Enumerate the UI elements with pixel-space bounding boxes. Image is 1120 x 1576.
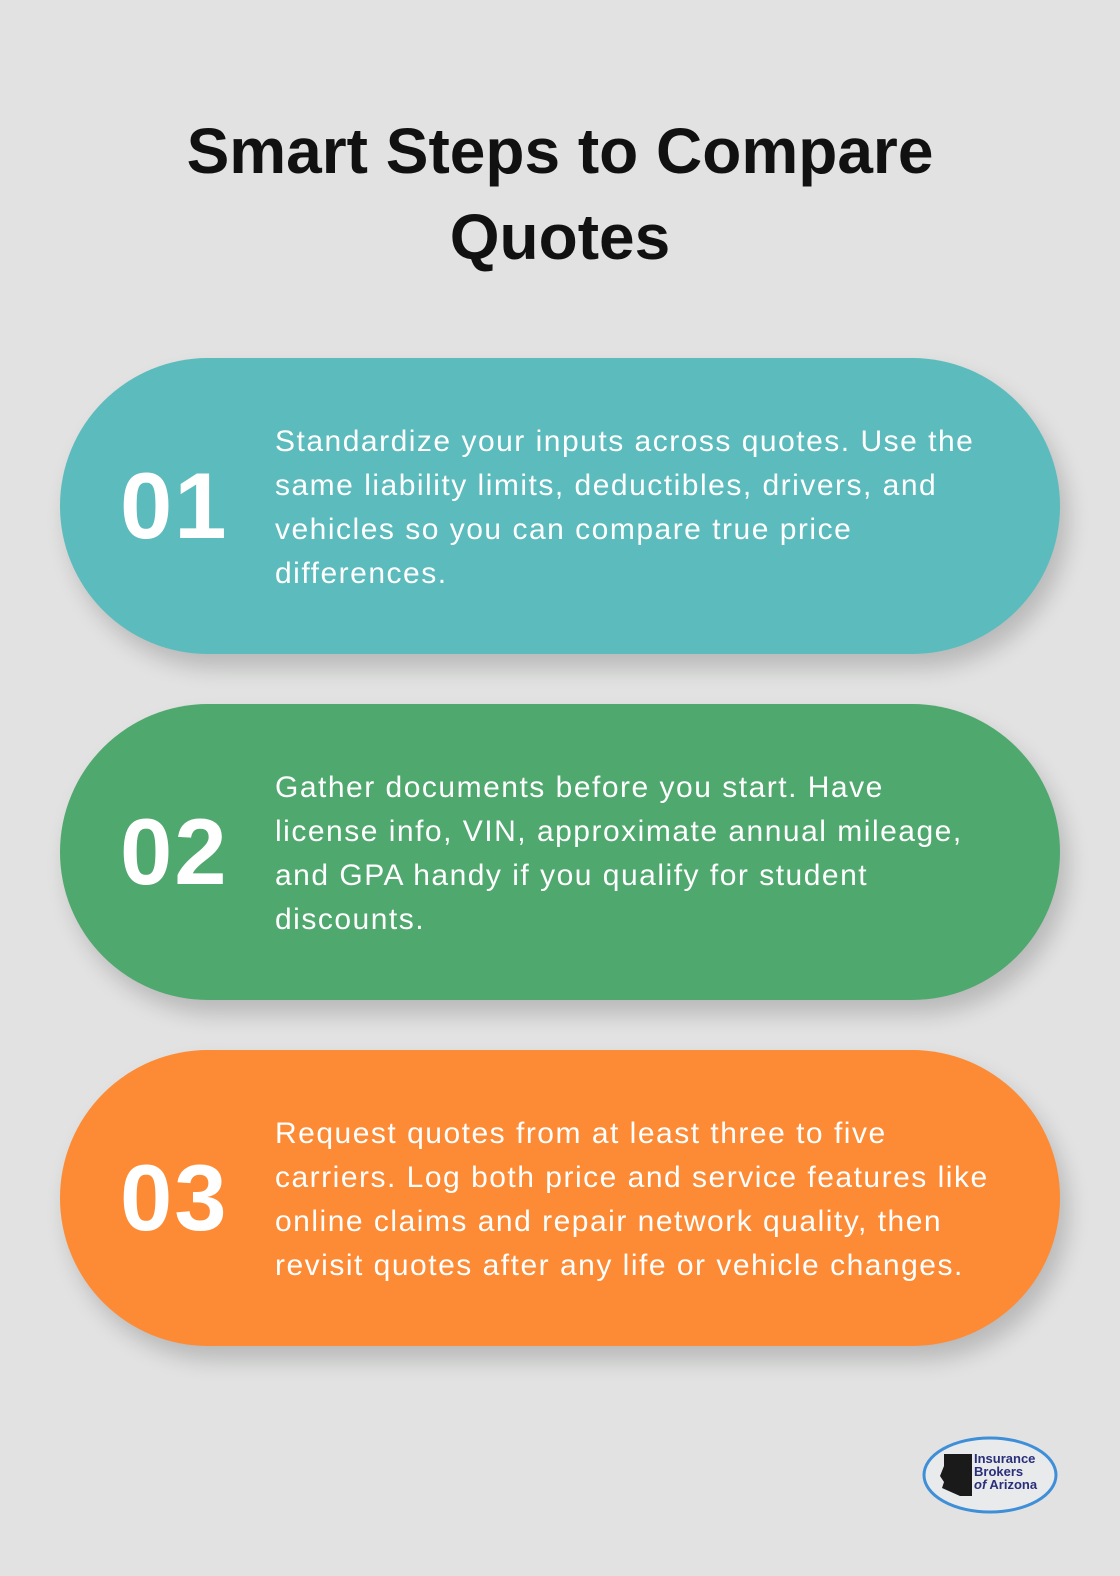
text step 03: online claims and repair network quality, then [275, 1205, 942, 1238]
number 01: 01 [120, 453, 229, 558]
text step 01 [275, 425, 974, 590]
text step 03 [275, 1117, 989, 1282]
title: Smart Steps to Compare [187, 115, 933, 187]
logo [922, 1436, 1058, 1514]
text step 02: discounts. [275, 903, 425, 936]
panel: step 03 [60, 1050, 1060, 1346]
text step 03: Request quotes from at least three to five [275, 1117, 887, 1150]
text step 01: vehicles so you can compare true price [275, 513, 852, 546]
logo: Insurance [974, 1451, 1035, 1466]
title: Quotes [450, 201, 670, 273]
number 03: 03 [120, 1145, 229, 1250]
text step 02 [275, 771, 963, 936]
logo: Brokers [974, 1464, 1023, 1479]
text step 01: differences. [275, 557, 448, 590]
panel: step 02 [60, 704, 1060, 1000]
text step 02: Gather documents before you start. Have [275, 771, 884, 804]
text step 02: license info, VIN, approximate annual mileage, [275, 815, 963, 848]
text step 03: revisit quotes after any life or vehicle changes. [275, 1249, 964, 1282]
title [187, 115, 933, 273]
text step 01: same liability limits, deductibles, drivers, and [275, 469, 937, 502]
number 02: 02 [120, 799, 229, 904]
logo: of Arizona [974, 1477, 1038, 1492]
panel: step 01 [60, 358, 1060, 654]
text step 02: and GPA handy if you qualify for student [275, 859, 868, 892]
text step 01: Standardize your inputs across quotes. Use the [275, 425, 974, 458]
text step 03: carriers. Log both price and service features like [275, 1161, 989, 1194]
